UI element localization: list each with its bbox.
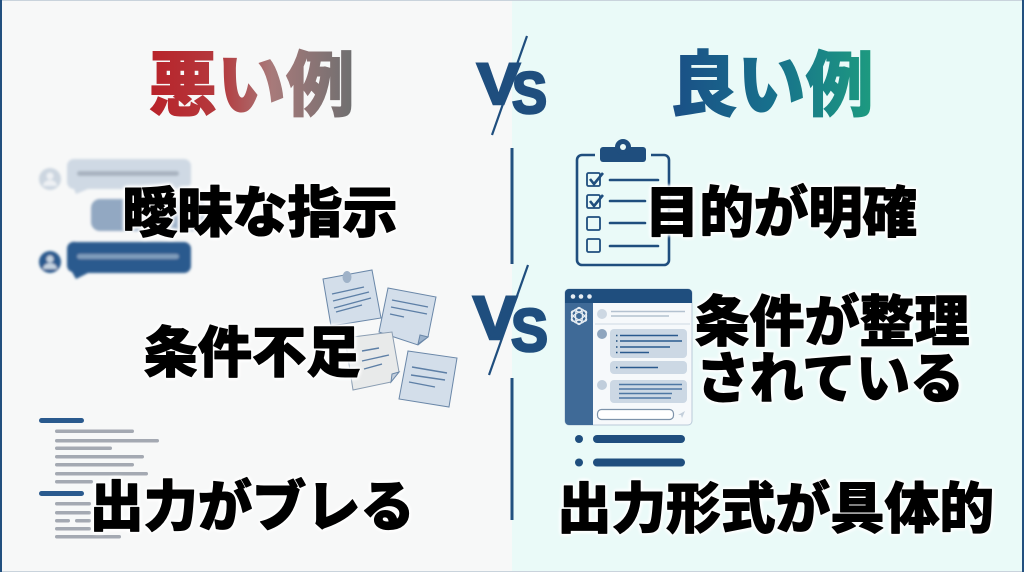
- avatars: [597, 329, 607, 390]
- label: output varies: 出力がブレる: [90, 476, 414, 538]
- icon: chat app window: [565, 289, 692, 425]
- output text lines: [55, 430, 159, 538]
- top VS badge: [477, 36, 547, 135]
- background: left panel: [0, 0, 512, 572]
- top VS badge: V: [477, 52, 520, 117]
- chat text 1: [77, 171, 179, 176]
- chat bubble 3: [67, 242, 191, 279]
- label: clear purpose: 目的が明確: [645, 182, 917, 244]
- window dots: [571, 294, 592, 299]
- window body: [565, 289, 692, 425]
- check marks: [590, 173, 603, 206]
- title bar: [565, 289, 692, 303]
- middle VS badge: [473, 265, 548, 375]
- label: missing conditions: 条件不足: [144, 322, 360, 384]
- checklist lines: [610, 180, 658, 246]
- checklist boxes: [587, 173, 600, 252]
- label: vague instructions: 曖昧な指示: [122, 182, 398, 244]
- label: concrete output format: 出力形式が具体的: [557, 478, 994, 540]
- middle VS badge: V: [473, 284, 517, 352]
- separator: [595, 323, 690, 325]
- chat bubble 1: [67, 159, 191, 194]
- input box: [598, 410, 674, 420]
- header row: [597, 309, 685, 319]
- top VS badge: S: [512, 61, 547, 126]
- message block 2: [610, 361, 687, 374]
- chat text 3: [77, 254, 179, 259]
- clipboard clip: [600, 139, 646, 162]
- output header bars: [39, 418, 84, 496]
- chat bubble 2: [91, 199, 205, 231]
- icon: scattered output lines: [39, 418, 159, 538]
- note 2: [379, 288, 436, 345]
- message block 3: [610, 380, 687, 403]
- logo: [570, 308, 588, 324]
- right bullet rows: [575, 435, 685, 466]
- clipboard frame: [577, 155, 669, 265]
- right frame edge: [1022, 0, 1024, 572]
- label: organized conditions line 1: 条件が整理: [694, 291, 970, 353]
- send icon: [678, 411, 685, 418]
- chat avatar 1: [39, 168, 61, 190]
- icon: clipboard checklist: [577, 139, 669, 265]
- note 3: [345, 332, 399, 390]
- label: organized conditions line 2: されている: [696, 348, 964, 410]
- chat avatar 2: [39, 251, 61, 273]
- center divider upper: [510, 148, 514, 264]
- left frame edge: [0, 0, 2, 572]
- note 1: [323, 270, 381, 326]
- middle VS badge: S: [511, 297, 548, 364]
- heading: good examples: 良い例: [670, 47, 874, 126]
- center divider lower: [510, 378, 514, 520]
- message block 1: [610, 329, 687, 358]
- heading: bad examples: 悪い例: [148, 47, 354, 126]
- icon: blurred chat bubbles: [39, 159, 205, 279]
- sidebar: [565, 300, 593, 425]
- icon: scattered paper notes: [323, 270, 457, 407]
- note 4: [399, 351, 457, 407]
- background: right panel: [512, 0, 1024, 572]
